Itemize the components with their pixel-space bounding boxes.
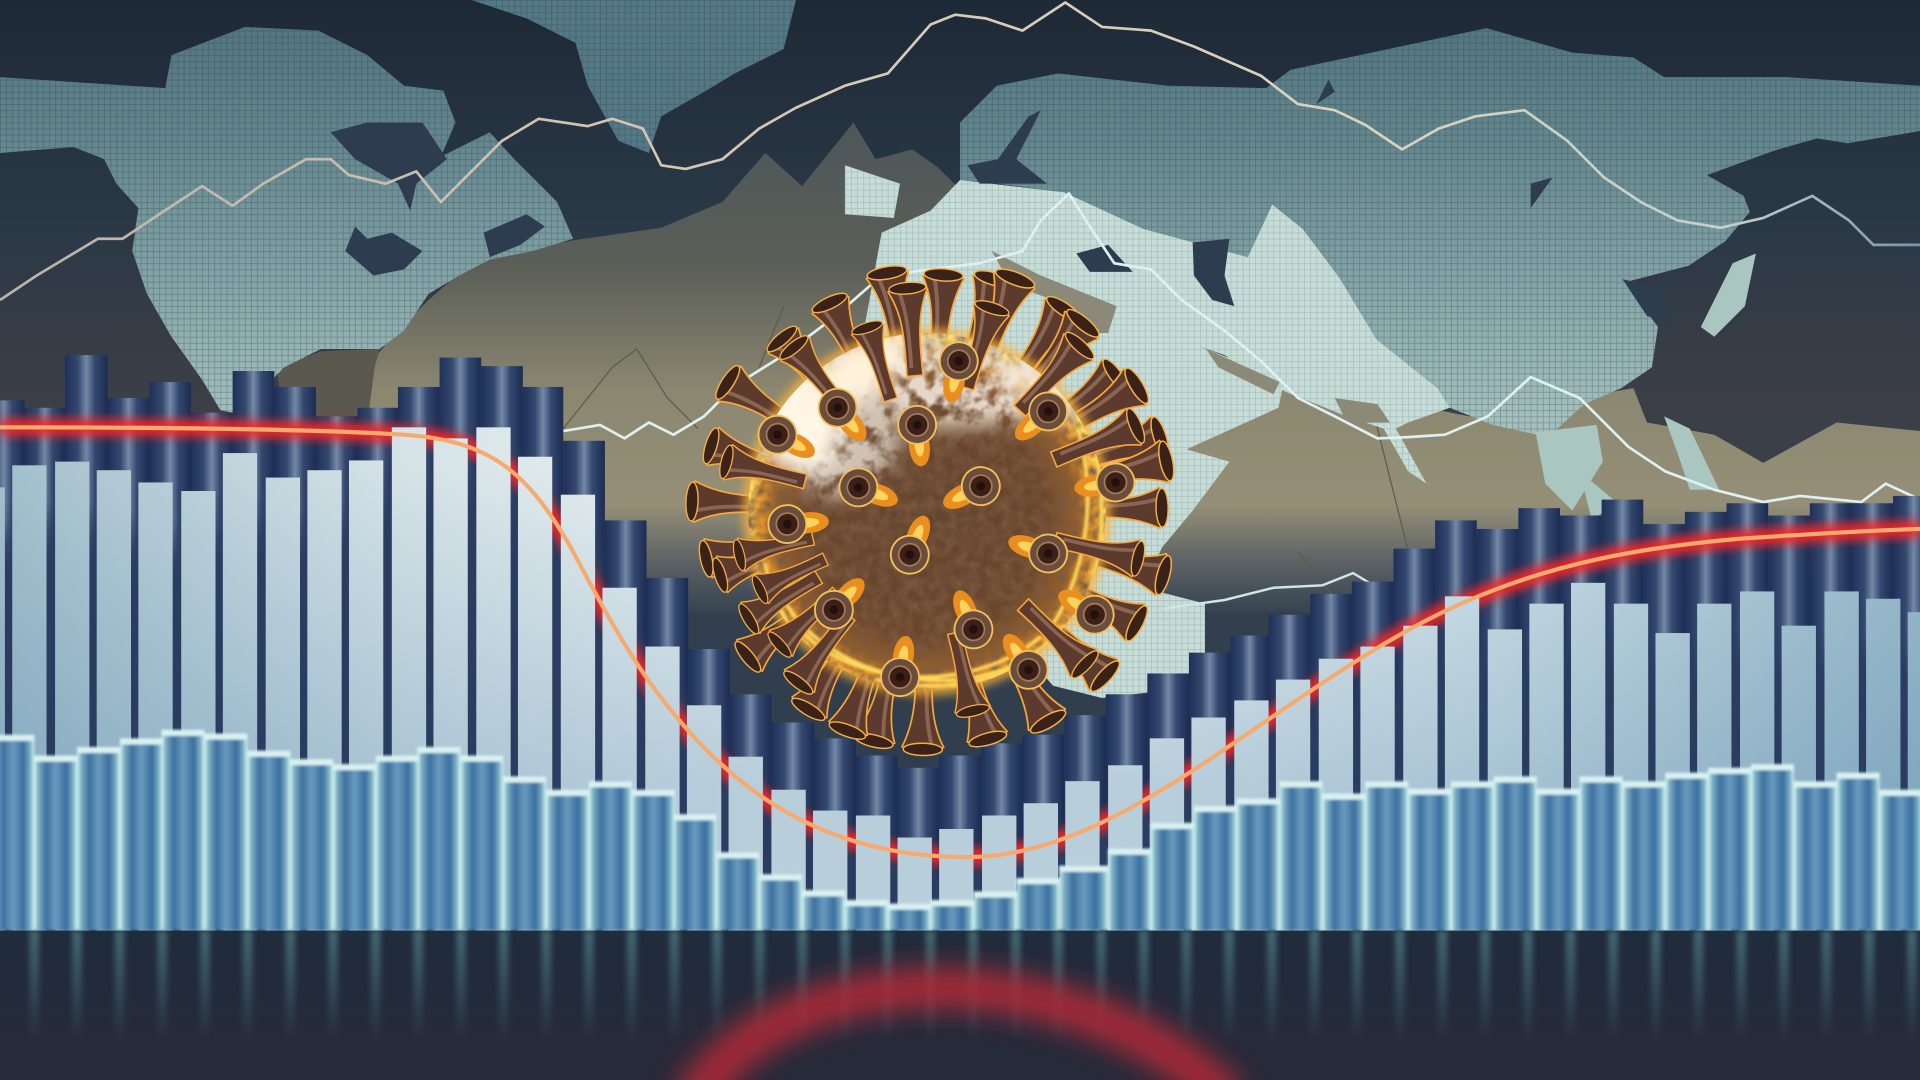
- reflective floor: [0, 931, 1920, 1080]
- continent: North America: [0, 27, 573, 414]
- continent: Europe and Africa, pale: [845, 165, 1450, 698]
- background: brown gulf patch: [277, 349, 380, 422]
- red line core: [0, 427, 1920, 857]
- chart line: upper world trend: [0, 2, 1920, 300]
- continent: Greenland: [471, 0, 796, 153]
- virus: back spikes: [685, 263, 1177, 756]
- world map: dotted continents: [0, 0, 1920, 698]
- chart line: right of virus: [1163, 573, 1378, 609]
- virus: spike heads facing the viewer: [752, 339, 1137, 699]
- map: Mediterranean strip: [992, 251, 1390, 422]
- continent: Eurasia: [960, 28, 1920, 437]
- chart line: lower pale trend: [563, 193, 1920, 502]
- continent: India and south-east Asia: [1536, 253, 1756, 520]
- virus: front spikes: [717, 281, 1148, 720]
- virus: body shading and texture: [748, 318, 1106, 691]
- bar chart: navy gaps behind white bars: [0, 464, 1920, 967]
- background: tan mountain chart: [367, 122, 1920, 612]
- virus: orange rim glow: [743, 328, 1111, 696]
- bar chart: dark navy back row: [0, 355, 1920, 931]
- virus particle: [685, 263, 1177, 756]
- red arc reflection on floor: [692, 988, 1231, 1080]
- bar chart: glowing blue front row: [0, 730, 1920, 931]
- map: seas and lakes: [331, 80, 1671, 324]
- front bars: bright top caps: [0, 730, 1920, 910]
- red line glow: [0, 427, 1920, 857]
- background: thin mountain outlines: [563, 306, 1408, 661]
- pale bars: blue shading toward the base: [0, 427, 1920, 931]
- bar chart: pale middle row: [0, 427, 1920, 931]
- virus: body sphere: [748, 333, 1106, 691]
